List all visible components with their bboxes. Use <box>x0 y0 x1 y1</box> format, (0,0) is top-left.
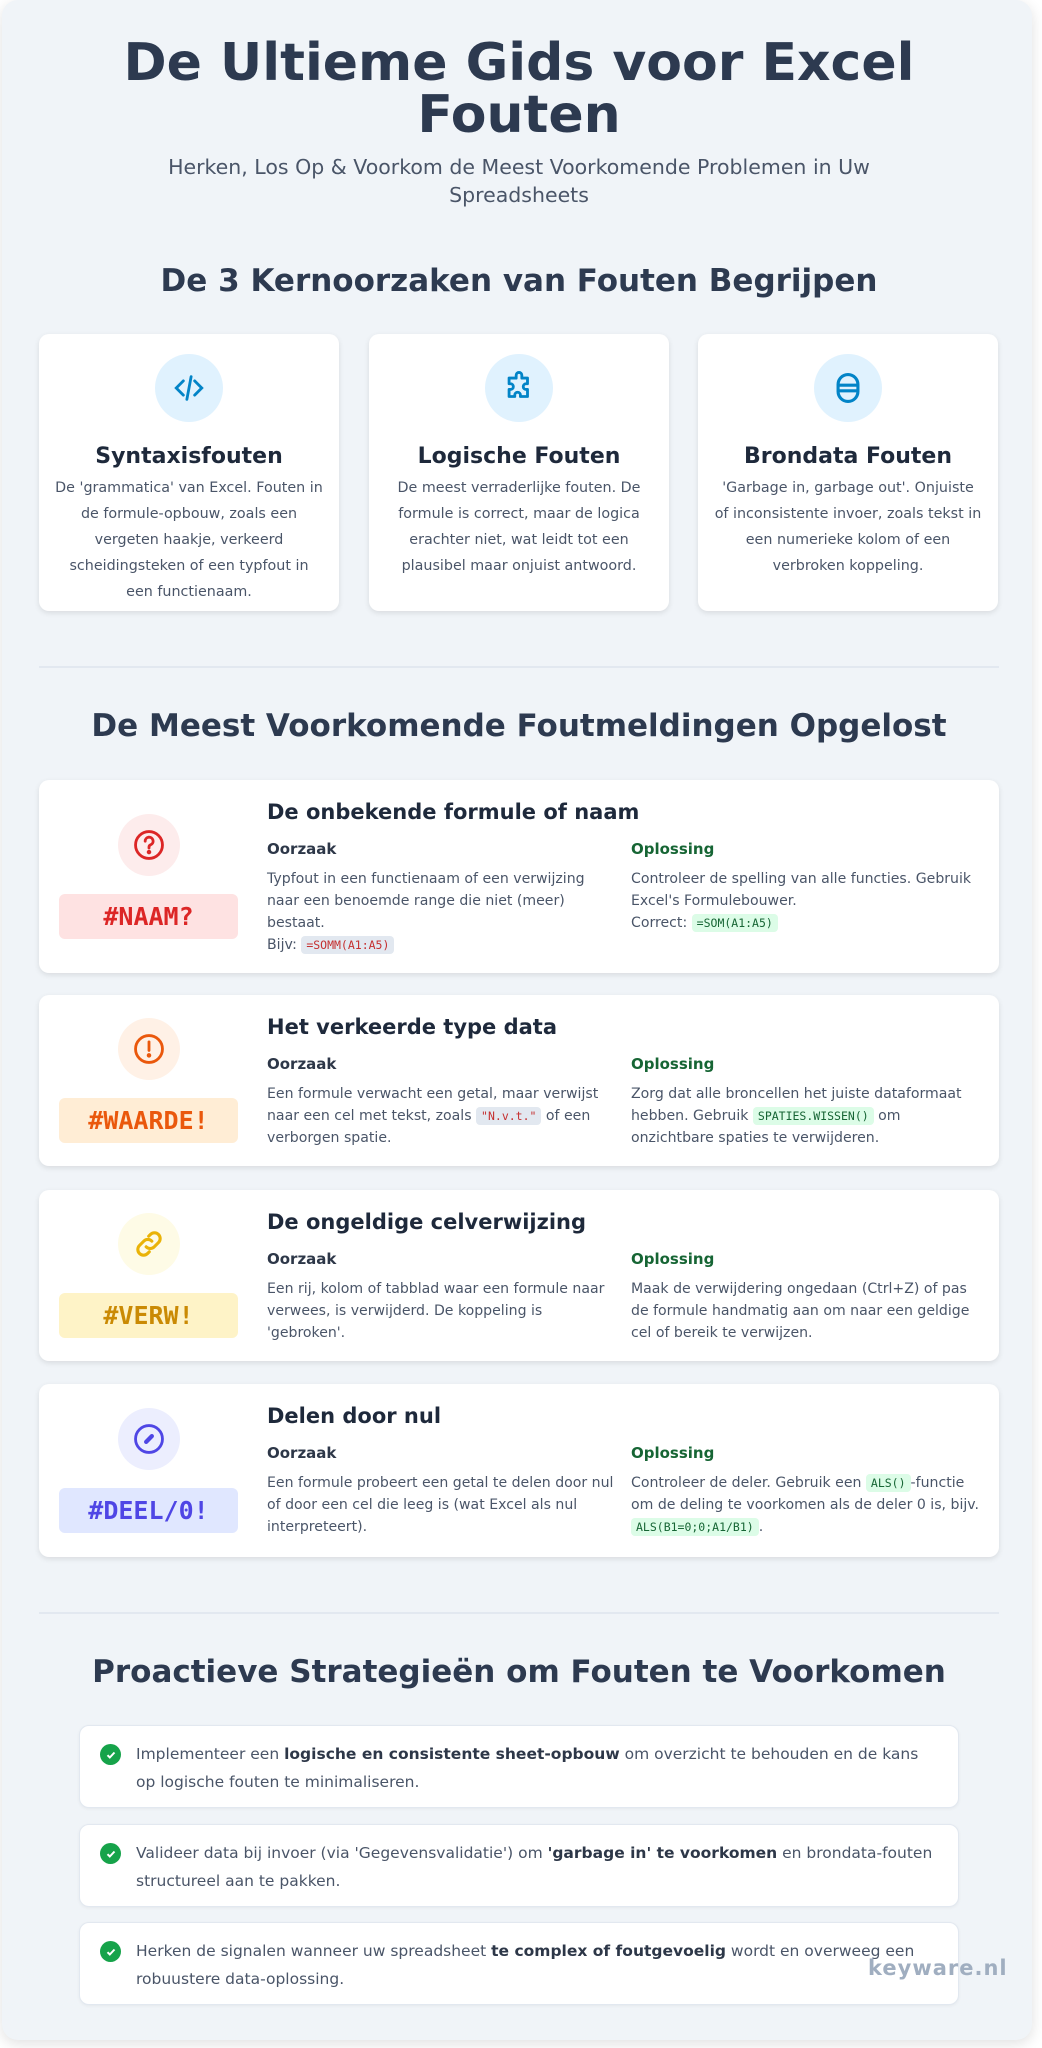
content: Oorzaak <box>267 840 336 858</box>
content: Zorg dat alle broncellen het juiste dataformaat hebben. Gebruik SPATIES.WISSEN() om onzichtbare spaties te verwijderen. <box>631 1086 962 1146</box>
content: Een rij, kolom of tabblad waar een formule naar verwees, is verwijderd. De koppeling is 'gebroken'. <box>267 1281 604 1341</box>
content: Een formule verwacht een getal, maar verwijst naar een cel met tekst, zoals "N.v.t." of een verborgen spatie. <box>267 1086 598 1146</box>
watermark: keyware.nl <box>868 1956 1008 1980</box>
strategy 2: Valideer data bij invoer (via 'Gegevensvalidatie') om 'garbage in' te voorkomen en brondata-fouten structureel aan te pakken. <box>136 1844 932 1890</box>
panel: #DEEL/0! <box>39 1384 999 1557</box>
panel: #VERW! <box>39 1190 999 1361</box>
content: Delen door nul <box>267 1404 441 1428</box>
heading: foutmeldingen: De Meest Voorkomende Foutmeldingen Opgelost <box>91 708 947 744</box>
content: Oplossing <box>631 1055 714 1073</box>
title: De Ultieme Gids voor Excel <box>124 33 914 93</box>
text: De meest verraderlijke fouten. De formule is correct, maar de logica erachter niet, wat leidt tot een plausibel maar onjuist antwoord. <box>398 480 640 574</box>
icon: code <box>155 354 223 422</box>
icon + badge <box>59 814 238 939</box>
content <box>267 1210 969 1341</box>
content: De onbekende formule of naam <box>267 800 639 824</box>
content <box>267 1404 979 1536</box>
content: Controleer de deler. Gebruik een ALS() -functie om de deling te voorkomen als de deler 0 is, bijv. ALS(B1=0;0;A1/B1) . <box>631 1475 979 1535</box>
title <box>124 33 914 145</box>
icon + badge: #NAAM? <box>103 902 194 931</box>
heading: strategieen: Proactieve Strategieën om Fouten te Voorkomen <box>92 1654 946 1690</box>
content: Het verkeerde type data <box>267 1015 557 1039</box>
content: Een formule probeert een getal te delen door nul of door een cel die leeg is (wat Excel als nul interpreteert). <box>267 1475 613 1535</box>
content: Controleer de spelling van alle functies. Gebruik Excel's Formulebouwer. <box>631 871 971 909</box>
content <box>267 1015 962 1146</box>
panel: logische fouten <box>369 334 669 611</box>
icon + badge: #VERW! <box>103 1301 194 1330</box>
content: Oorzaak <box>267 1055 336 1073</box>
content: Maak de verwijdering ongedaan (Ctrl+Z) of pas de formule handmatig aan om naar een geldige cel of bereik te verwijzen. <box>631 1281 969 1341</box>
content: Bijv: =SOMM(A1:A5) <box>267 937 389 953</box>
panel: brondata fouten <box>698 334 998 611</box>
content: Oplossing <box>631 840 714 858</box>
panel: syntaxisfouten <box>39 334 339 611</box>
heading: Brondata Fouten <box>744 444 952 469</box>
icon + badge <box>59 1408 238 1533</box>
panel: #WAARDE! <box>39 995 999 1166</box>
title: Fouten <box>417 85 621 145</box>
icon + badge <box>59 1213 238 1338</box>
icon + badge <box>59 1018 238 1143</box>
content: Oplossing <box>631 1444 714 1462</box>
content <box>266 800 971 954</box>
content: Oorzaak <box>267 1444 336 1462</box>
strategy 3: Herken de signalen wanneer uw spreadsheet te complex of foutgevoelig wordt en overweeg een robuustere data-oplossing. <box>136 1942 914 1988</box>
strategy 2 <box>79 1824 959 1907</box>
heading: Syntaxisfouten <box>95 444 283 469</box>
content: Correct: =SOM(A1:A5) <box>631 915 773 931</box>
content: Typfout in een functienaam of een verwijzing naar een benoemde range die niet (meer) bestaat. <box>267 871 585 931</box>
strategy 1: Implementeer een logische en consistente sheet-opbouw om overzicht te behouden en de kans op logische fouten te minimaliseren. <box>136 1745 918 1791</box>
strategy 3 <box>79 1922 959 2005</box>
icon: puzzle <box>485 354 553 422</box>
text: 'Garbage in, garbage out'. Onjuiste of inconsistente invoer, zoals tekst in een numerieke kolom of een verbroken koppeling. <box>715 480 981 574</box>
heading: Logische Fouten <box>418 444 620 469</box>
icon + badge: #WAARDE! <box>88 1106 209 1135</box>
content: Oplossing <box>631 1250 714 1268</box>
text: De 'grammatica' van Excel. Fouten in de formule-opbouw, zoals een vergeten haakje, verkeerd scheidingsteken of een typfout in een functienaam. <box>55 480 323 600</box>
content: Oorzaak <box>267 1250 336 1268</box>
icon + badge: #DEEL/0! <box>88 1496 209 1525</box>
strategy 1 <box>79 1725 959 1808</box>
heading: kernoorzaken: De 3 Kernoorzaken van Fouten Begrijpen <box>161 263 877 299</box>
panel: #NAAM? <box>39 780 999 973</box>
content: De ongeldige celverwijzing <box>267 1210 586 1234</box>
subtitle: Herken, Los Op & Voorkom de Meest Voorkomende Problemen in Uw Spreadsheets <box>168 155 870 207</box>
icon: database <box>814 354 882 422</box>
